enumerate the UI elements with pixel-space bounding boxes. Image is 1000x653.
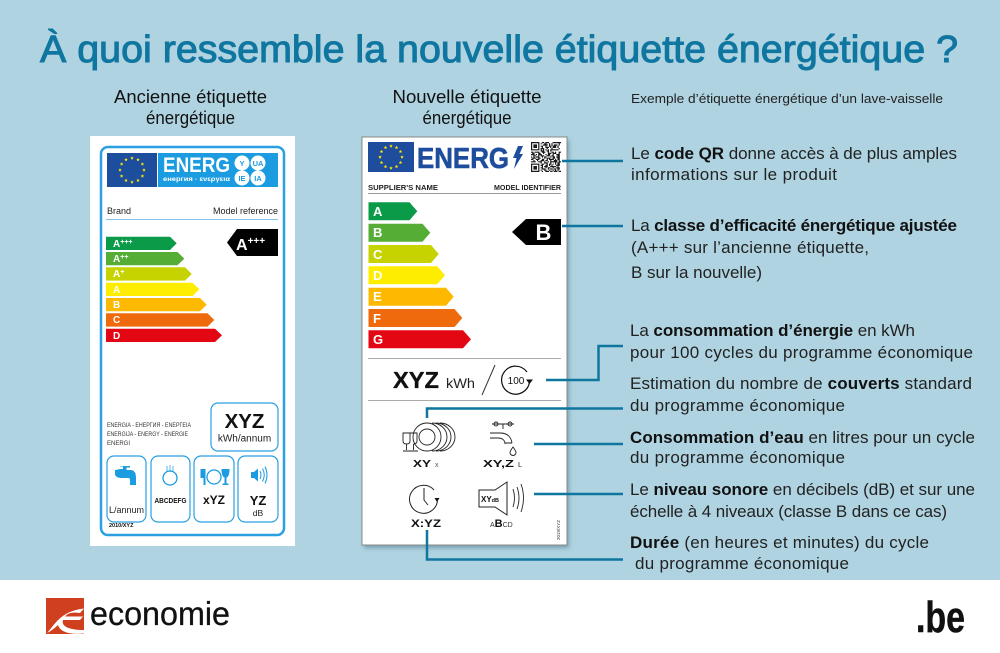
old label rating bars: +++ xyxy=(120,239,132,246)
new label class arrow xyxy=(512,219,561,245)
new label rating bars: A xyxy=(373,204,383,219)
old label header: Y xyxy=(239,159,245,168)
supplier and model identifiers: MODEL IDENTIFIER xyxy=(494,185,561,192)
old label header xyxy=(107,153,278,187)
new label rating bars: G xyxy=(373,332,383,347)
text block: place settings xyxy=(630,374,972,415)
place settings box: xYZ xyxy=(203,493,225,507)
connector: energy consumption xyxy=(546,346,623,380)
energy consumption row: XYZ xyxy=(393,367,439,393)
old label rating bars xyxy=(106,237,222,342)
connector: efficiency class xyxy=(562,225,623,227)
text block: QR code xyxy=(631,144,957,184)
wash class box: ABCDEFG xyxy=(154,496,187,505)
brand and model reference: Model reference xyxy=(213,206,278,216)
old label rating bars: A xyxy=(113,285,120,296)
text block: efficiency class xyxy=(631,216,957,282)
new label header xyxy=(368,142,523,175)
wash class box xyxy=(151,456,190,522)
footer band xyxy=(0,580,1000,653)
multilingual energy words xyxy=(107,423,191,447)
text block: water: Consommation d’eau en litres pour un cycle xyxy=(630,428,975,447)
regulation number: 2010/XYZ xyxy=(109,523,134,529)
old label rating bars: A xyxy=(113,254,120,265)
text block: QR code: informations sur le produit xyxy=(631,165,837,184)
text block: energy consumption: pour 100 cycles du programme économique xyxy=(630,343,973,362)
connector: noise xyxy=(534,493,623,495)
connector: place settings xyxy=(427,408,623,418)
heading: old label: énergétique xyxy=(146,108,235,128)
supplier and model identifiers: SUPPLIER'S NAME xyxy=(368,185,438,192)
old label rating bars: ++ xyxy=(120,254,128,261)
panel: old energy label xyxy=(90,136,295,546)
text block: efficiency class: (A+++ sur l’ancienne étiquette, xyxy=(631,238,869,257)
old label rating bars: A xyxy=(113,239,120,250)
energy consumption row xyxy=(368,358,561,401)
water box: L/annum xyxy=(109,505,144,515)
annual consumption box xyxy=(211,403,278,451)
icon: water tap: XY,Z xyxy=(483,458,515,470)
new label rating bars: D xyxy=(373,268,382,283)
text block: efficiency class: B sur la nouvelle) xyxy=(631,263,762,282)
new label rating bars: F xyxy=(373,311,381,326)
old label header: IA xyxy=(254,174,262,183)
old label class arrow: +++ xyxy=(248,236,265,247)
brand and model reference: Brand xyxy=(107,206,131,216)
icon: place settings: XY xyxy=(413,458,431,470)
text block: duration: Durée (en heures et minutes) du cycle xyxy=(630,533,929,552)
text block: duration xyxy=(630,533,929,573)
annual consumption box: XYZ xyxy=(225,410,264,433)
heading: new label: énergétique xyxy=(422,108,512,128)
energy consumption row: 100 xyxy=(508,376,525,387)
text block: noise: échelle à 4 niveaux (classe B dans ce cas) xyxy=(630,502,947,521)
energy consumption row: kWh xyxy=(446,376,475,391)
text block: noise xyxy=(630,480,975,521)
text block: energy consumption xyxy=(630,321,973,362)
text block: water: du programme économique xyxy=(630,448,845,467)
brand and model reference xyxy=(106,206,278,220)
old label header: UA xyxy=(253,159,264,168)
icon: place settings xyxy=(403,423,455,470)
text block: place settings: du programme économique xyxy=(630,396,845,415)
icon: loudspeaker: ABCD xyxy=(490,518,513,530)
QR code xyxy=(531,142,561,172)
supplier and model identifiers xyxy=(368,185,561,194)
new label header: ENERG xyxy=(417,143,509,175)
logo: economie: economie xyxy=(90,595,230,632)
connector: duration xyxy=(427,530,623,560)
text block: noise: Le niveau sonore en décibels (dB) et sur une xyxy=(630,480,975,499)
panel: new energy label xyxy=(362,137,569,548)
place settings box xyxy=(194,456,234,522)
old label header: IE xyxy=(238,174,246,183)
text block: water xyxy=(630,428,975,467)
text block: energy consumption: La consommation d’énergie en kWh xyxy=(630,321,915,340)
text block: place settings: Estimation du nombre de couverts standard xyxy=(630,374,972,393)
old label header: енергия · ενεργεια xyxy=(163,176,230,183)
multilingual energy words: ENERGI xyxy=(107,441,130,447)
icon: clock xyxy=(410,485,441,530)
old label rating bars: A xyxy=(113,269,120,280)
old label class arrow xyxy=(227,229,278,256)
multilingual energy words: ENERGIA - ЕНЕРГИЯ - ΕΝΕΡΓΕΙΑ xyxy=(107,423,191,429)
text block: efficiency class: La classe d’efficacité énergétique ajustée xyxy=(631,216,957,235)
old label rating bars: B xyxy=(113,300,120,311)
noise box: dB xyxy=(253,508,264,518)
heading: old label xyxy=(114,87,267,128)
icon: water tap xyxy=(483,422,522,470)
title: À quoi ressemble la nouvelle étiquette énergétique ? xyxy=(40,28,958,71)
old label rating bars: + xyxy=(120,269,124,276)
caption: example: Exemple d’étiquette énergétique d’un lave-vaisselle xyxy=(631,91,943,106)
icon: water tap: L xyxy=(518,460,522,469)
old label rating bars: C xyxy=(113,315,120,326)
text block: duration: du programme économique xyxy=(635,554,849,573)
new label rating bars: E xyxy=(373,289,382,304)
new label rating bars: C xyxy=(373,247,383,262)
old label rating bars: D xyxy=(113,331,120,342)
text block: QR code: Le code QR donne accès à de plus amples xyxy=(631,144,957,163)
heading: new label xyxy=(392,87,542,128)
noise box xyxy=(238,456,278,522)
connector: QR code xyxy=(562,160,623,162)
icon: place settings: x xyxy=(435,462,439,469)
annual consumption box: kWh/annum xyxy=(218,434,271,444)
new label rating bars xyxy=(368,202,471,348)
old label class arrow: A xyxy=(236,237,248,254)
icon: loudspeaker xyxy=(479,482,524,530)
new label class arrow: B xyxy=(536,220,551,245)
connector: water xyxy=(534,443,623,445)
multilingual energy words: ENERGIJA - ENERGY - ENERGIE xyxy=(107,432,188,438)
icon: clock: X:YZ xyxy=(411,518,441,530)
old label header: ENERG xyxy=(163,154,230,177)
noise box: YZ xyxy=(250,493,266,508)
heading: new label: Nouvelle étiquette xyxy=(392,87,542,107)
icon: loudspeaker: XYdB xyxy=(481,495,499,504)
new label rating bars: B xyxy=(373,225,382,240)
logo: .be: .be xyxy=(916,593,965,642)
regulation number: 2019/XYZ xyxy=(556,520,561,540)
water box xyxy=(107,456,146,522)
heading: old label: Ancienne étiquette xyxy=(114,87,267,107)
